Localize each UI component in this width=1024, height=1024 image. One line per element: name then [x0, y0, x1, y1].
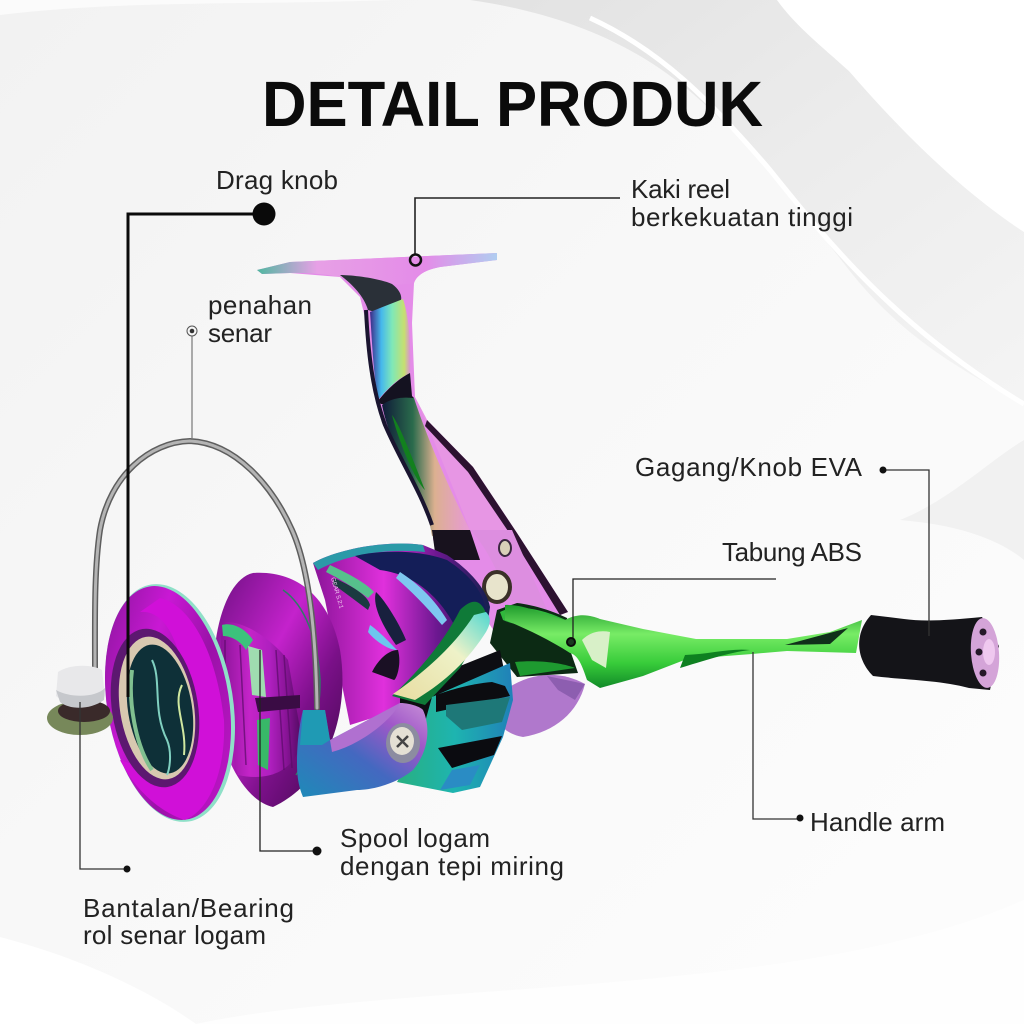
- handle cap: [490, 603, 578, 677]
- lower rotor teal supports: [397, 663, 513, 793]
- front spool flange: [89, 575, 251, 831]
- fishing reel product image: [47, 253, 1001, 831]
- rotor rim band: [393, 612, 490, 700]
- handle arm: [505, 605, 862, 688]
- callout: Kaki reel: [410, 174, 853, 266]
- callout: Spool logam: [260, 650, 564, 881]
- callout: Bantalan/Bearing: [80, 702, 294, 950]
- callout: Bantalan/Bearing: Bantalan/Bearing: [83, 893, 294, 923]
- callout: Drag knob: [128, 165, 338, 697]
- reel foot and stem: [257, 253, 568, 640]
- rear spool flange: [213, 573, 342, 807]
- bail arm: [297, 703, 427, 797]
- line roller: [47, 666, 113, 735]
- callout: penahan senar: [187, 290, 312, 440]
- callout: Tabung ABS: Tabung ABS: [722, 537, 862, 567]
- rotor body: GEAR 5.2:1: [329, 577, 344, 610]
- title: DETAIL PRODUK: [262, 68, 763, 140]
- callout: Gagang/Knob EVA: [635, 452, 929, 636]
- callout: Kaki reel: Kaki reel: [631, 174, 730, 204]
- callout: Spool logam: Spool logam: [340, 823, 490, 853]
- spool barrel: [221, 622, 302, 777]
- callout: penahan senar: senar: [208, 318, 272, 348]
- callout: Gagang/Knob EVA: Gagang/Knob EVA: [635, 452, 863, 482]
- callout: Tabung ABS: [567, 537, 862, 646]
- callout: Kaki reel: berkekuatan tinggi: [631, 202, 853, 232]
- callout: Drag knob: Drag knob: [216, 165, 338, 195]
- EVA knob: [859, 615, 1001, 690]
- callout: Bantalan/Bearing: rol senar logam: [83, 920, 266, 950]
- callout: Handle arm: Handle arm: [810, 807, 945, 837]
- rotor body: [313, 544, 510, 780]
- callout: Spool logam: dengan tepi miring: [340, 851, 564, 881]
- handle base cover: [503, 675, 585, 737]
- callout: Handle arm: [753, 652, 945, 837]
- bail wire: [95, 441, 317, 708]
- callout: penahan senar: penahan: [208, 290, 312, 320]
